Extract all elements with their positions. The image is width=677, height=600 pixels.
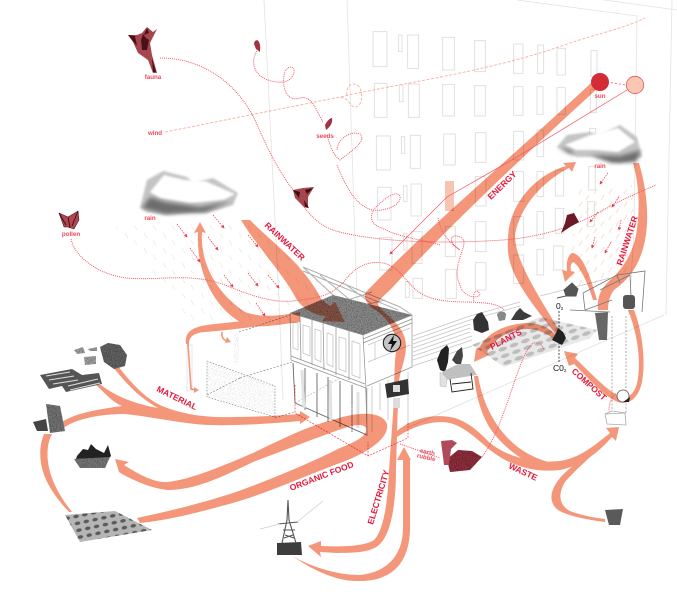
icon: electricity badge — [383, 334, 401, 352]
wind path — [165, 18, 645, 132]
label: pollen: pollen — [62, 231, 80, 238]
icon: sun — [591, 73, 609, 91]
icon: crop field — [65, 511, 152, 542]
flow: bags to field — [40, 434, 72, 512]
flow arrowheads thin — [194, 337, 231, 393]
label: earth rubble: rubble — [416, 453, 437, 463]
icon: barrel — [623, 295, 635, 309]
label: WASTE: WASTE — [507, 461, 539, 483]
label: earth rubble: earth — [419, 448, 435, 458]
label: COMPOST: COMPOST — [570, 366, 609, 403]
upper facade — [290, 313, 412, 388]
mesh panel large — [207, 361, 275, 417]
flow: energy from sun — [365, 82, 598, 382]
label: wind: wind — [147, 130, 162, 137]
icon: cement bags — [33, 404, 65, 433]
icon: agave — [511, 308, 532, 320]
flow: rainwater right — [598, 163, 647, 310]
flow: thin branches — [188, 332, 227, 390]
background apartment block facade — [264, 0, 677, 427]
flow: plants — [474, 323, 563, 362]
icon: butterfly — [59, 211, 79, 229]
flow: material — [62, 366, 310, 428]
icon: pylon — [260, 500, 323, 555]
storage column outline — [187, 345, 192, 391]
label: O2: 2 — [561, 306, 564, 311]
mesh panel small — [234, 331, 239, 365]
icon: basket — [74, 444, 111, 468]
icon: earth rubble heap — [441, 440, 482, 472]
rubble links — [400, 343, 544, 458]
icon: seed 1 — [254, 40, 260, 52]
icon: market table and people — [437, 345, 477, 392]
icon: watering can — [557, 283, 578, 298]
label: rain left: rain — [144, 215, 156, 222]
icon: pallets — [40, 369, 102, 392]
icon: fauna bird — [128, 27, 157, 73]
building — [290, 267, 412, 435]
flow: waste from bucket — [551, 447, 605, 522]
icon: compost box — [605, 411, 626, 425]
icon: plant left — [473, 312, 489, 333]
label: MATERIAL: MATERIAL — [155, 384, 199, 412]
dashed projection lines — [207, 315, 294, 418]
flow: waste main — [397, 416, 619, 471]
flow: waste from market table — [474, 376, 560, 470]
rain streaks right — [570, 185, 635, 288]
label: sun: sun — [594, 93, 606, 100]
dashed red site outline — [295, 385, 408, 456]
rain arrows — [177, 173, 621, 316]
lower glazed storey — [293, 363, 367, 435]
compost bin link — [609, 393, 618, 411]
label: CO2: 2 — [564, 368, 567, 373]
icon: small bird — [293, 187, 314, 208]
icon: electricity meter — [385, 379, 409, 408]
label: PLANTS: PLANTS — [488, 327, 524, 352]
label: rain right: rain — [594, 163, 606, 170]
greenhouse frame — [303, 267, 412, 315]
flow: evaporation to right cloud — [508, 162, 576, 337]
label: RAINWATER left: RAINWATER — [263, 220, 308, 263]
label: ORGANIC FOOD: ORGANIC FOOD — [288, 459, 355, 493]
rain streaks left — [115, 222, 330, 325]
icon: compost clock — [617, 390, 630, 402]
label: ENERGY: ENERGY — [485, 169, 519, 201]
icon: seed 2 — [325, 118, 332, 130]
seeds drift path — [254, 51, 480, 302]
green roof — [290, 295, 412, 335]
icon: plant pot — [497, 312, 506, 321]
icon: rocks — [74, 343, 127, 369]
icon: sun second position — [626, 76, 644, 94]
label: fauna: fauna — [145, 74, 162, 81]
icon: right cloud — [557, 125, 642, 163]
flow: electricity out — [308, 400, 398, 557]
icon: bucket — [605, 509, 623, 525]
flow: rainwater to storage — [186, 316, 290, 344]
planting bed — [472, 317, 597, 367]
flow: evaporation to left cloud — [194, 222, 300, 326]
CO2/O2 dashed axis — [558, 311, 560, 362]
flow: organic food — [115, 414, 387, 523]
flow: watering — [562, 253, 597, 300]
sun ray to building — [390, 90, 627, 254]
ground columns — [367, 372, 408, 435]
sun link dashed — [607, 82, 626, 85]
flow: rainwater into roof — [241, 220, 345, 322]
mesh panel texture — [207, 361, 275, 417]
label: CO2: C0 — [553, 363, 564, 373]
icon: rain collector canopy — [570, 271, 645, 312]
label: ELECTRICITY: ELECTRICITY — [365, 469, 391, 526]
facade fill — [290, 313, 412, 433]
resource flows — [40, 82, 647, 581]
icon: garbage bin — [595, 312, 608, 340]
icon: left cloud — [140, 171, 238, 215]
icon: right bird — [561, 213, 579, 233]
icon: central plant — [552, 328, 566, 345]
highlighted window — [445, 181, 454, 211]
label: O2: 0 — [556, 301, 561, 311]
flow: electricity in from pylon — [292, 447, 411, 581]
label: seeds: seeds — [316, 133, 334, 140]
terrace fence and deck — [413, 278, 610, 366]
pollen drift path — [71, 239, 504, 310]
flow: compost — [564, 310, 644, 403]
label: RAINWATER right: RAINWATER — [614, 214, 640, 267]
fauna flight path — [160, 58, 656, 242]
compost drop lines — [612, 316, 626, 414]
